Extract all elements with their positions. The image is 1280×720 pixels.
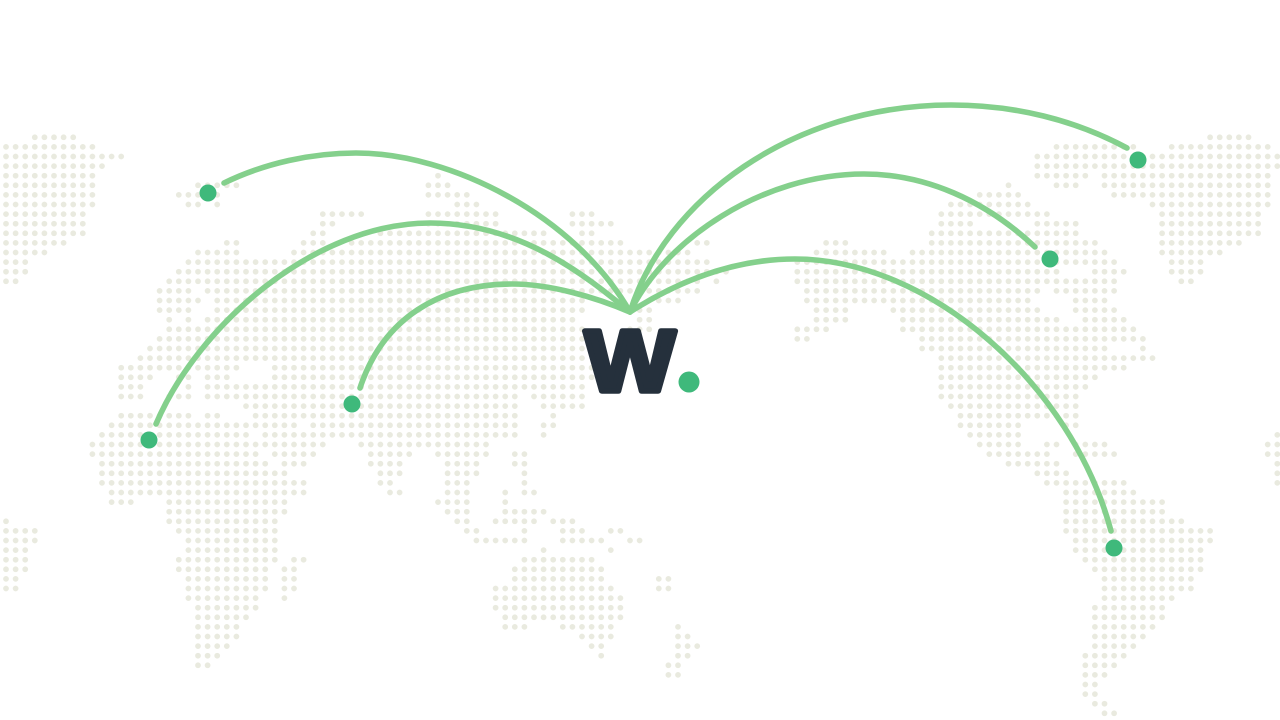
marker: south-east (1106, 540, 1122, 556)
dot map: east block (797, 137, 1278, 713)
arc: north-east link (630, 174, 1035, 312)
arc: south-east link (630, 259, 1111, 531)
connection arcs (156, 105, 1127, 531)
marker: north-west (200, 184, 216, 202)
logo letter W: W (585, 313, 676, 410)
marker: near west (344, 396, 360, 412)
location markers (140, 152, 1146, 556)
logo dot (678, 372, 700, 392)
marker: north-east (1042, 250, 1058, 268)
marker: far north-east (1130, 152, 1146, 168)
arc: far north-east link (630, 105, 1127, 312)
arc: far west link (156, 223, 630, 424)
dot map: west block (6, 137, 727, 675)
logo (585, 313, 700, 410)
arc: near west link (360, 284, 630, 388)
arc: north-west link (224, 153, 630, 312)
marker: far west (140, 432, 158, 448)
